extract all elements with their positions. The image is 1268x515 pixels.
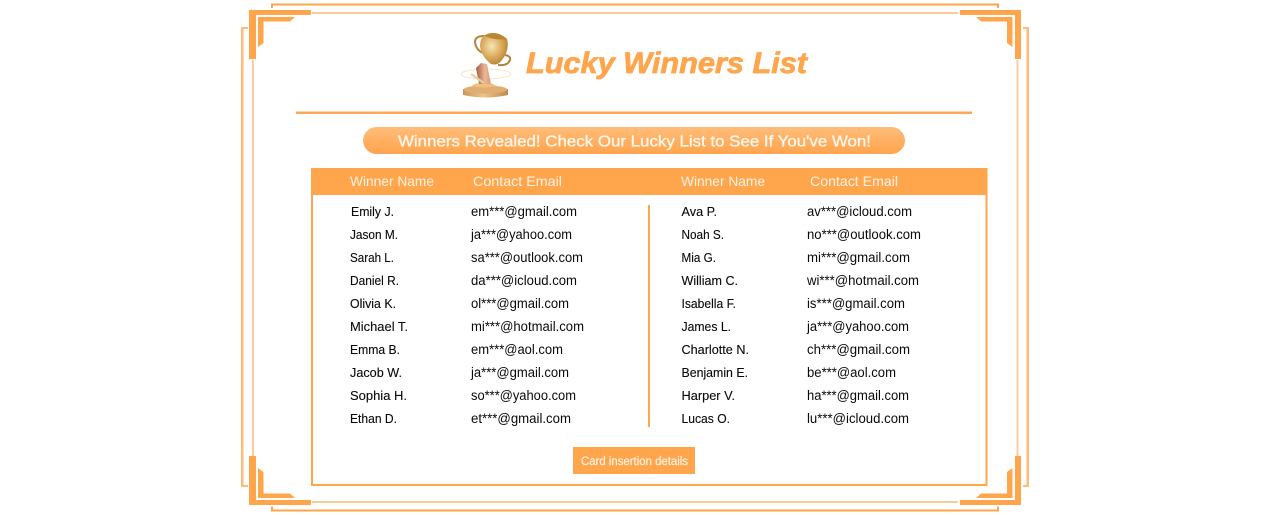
table header: Winner Name — [681, 173, 765, 189]
right winners column: av***@icloud.com — [807, 204, 912, 219]
right winners column: no***@outlook.com — [807, 227, 921, 242]
column divider — [648, 205, 650, 427]
left winners column: Michael T. — [350, 319, 408, 334]
right winners column: Lucas O. — [682, 411, 730, 426]
banner: winners revealed: Winners Revealed! Check Our Lucky List to See If You've Won! — [398, 134, 871, 150]
panel: winners table — [311, 168, 988, 485]
right winners column: Mia G. — [682, 250, 716, 265]
right winners column: Harper V. — [682, 388, 735, 403]
left winners column: em***@aol.com — [471, 342, 563, 357]
left winners column: Olivia K. — [350, 296, 396, 311]
left winners column: mi***@hotmail.com — [471, 319, 584, 334]
left winners column: so***@yahoo.com — [471, 388, 576, 403]
decorative frame — [241, 4, 1029, 512]
button: card insertion details — [573, 447, 695, 474]
right winners column — [682, 204, 921, 426]
table header: Contact Email — [473, 173, 562, 189]
table header: Contact Email — [810, 173, 898, 189]
right winners column: mi***@gmail.com — [807, 250, 910, 265]
right winners column: wi***@hotmail.com — [806, 273, 919, 288]
left winners column: Emma B. — [350, 342, 400, 357]
left winners column — [350, 204, 584, 426]
left winners column: ja***@yahoo.com — [470, 227, 572, 242]
icon: golden trophy — [461, 33, 511, 98]
right winners column: Isabella F. — [682, 296, 736, 311]
divider rule — [296, 112, 972, 114]
title: Lucky Winners List — [526, 47, 809, 80]
right winners column: Charlotte N. — [682, 342, 749, 357]
right winners column: ch***@gmail.com — [807, 342, 910, 357]
left winners column: Daniel R. — [350, 273, 399, 288]
left winners column: Ethan D. — [350, 411, 397, 426]
left winners column: Sophia H. — [350, 388, 407, 403]
left winners column: et***@gmail.com — [471, 411, 571, 426]
table header — [311, 168, 988, 195]
right winners column: James L. — [682, 319, 731, 334]
right winners column: William C. — [682, 273, 738, 288]
left winners column: Jason M. — [350, 227, 398, 242]
left winners column: ol***@gmail.com — [471, 296, 569, 311]
left winners column: Jacob W. — [350, 365, 402, 380]
left winners column: Emily J. — [351, 204, 394, 219]
right winners column: is***@gmail.com — [807, 296, 905, 311]
table header: Winner Name — [350, 173, 434, 189]
right winners column: ha***@gmail.com — [807, 388, 909, 403]
right winners column: ja***@yahoo.com — [806, 319, 909, 334]
left winners column: em***@gmail.com — [471, 204, 577, 219]
right winners column: Benjamin E. — [682, 365, 748, 380]
left winners column: Sarah L. — [350, 250, 394, 265]
left winners column: da***@icloud.com — [471, 273, 577, 288]
left winners column: sa***@outlook.com — [471, 250, 583, 265]
left winners column: ja***@gmail.com — [470, 365, 569, 380]
right winners column: lu***@icloud.com — [807, 411, 909, 426]
right winners column: be***@aol.com — [807, 365, 896, 380]
banner: winners revealed — [363, 127, 905, 154]
right winners column: Noah S. — [682, 227, 724, 242]
button: card insertion details: Card insertion details — [581, 456, 688, 468]
right winners column: Ava P. — [682, 204, 717, 219]
